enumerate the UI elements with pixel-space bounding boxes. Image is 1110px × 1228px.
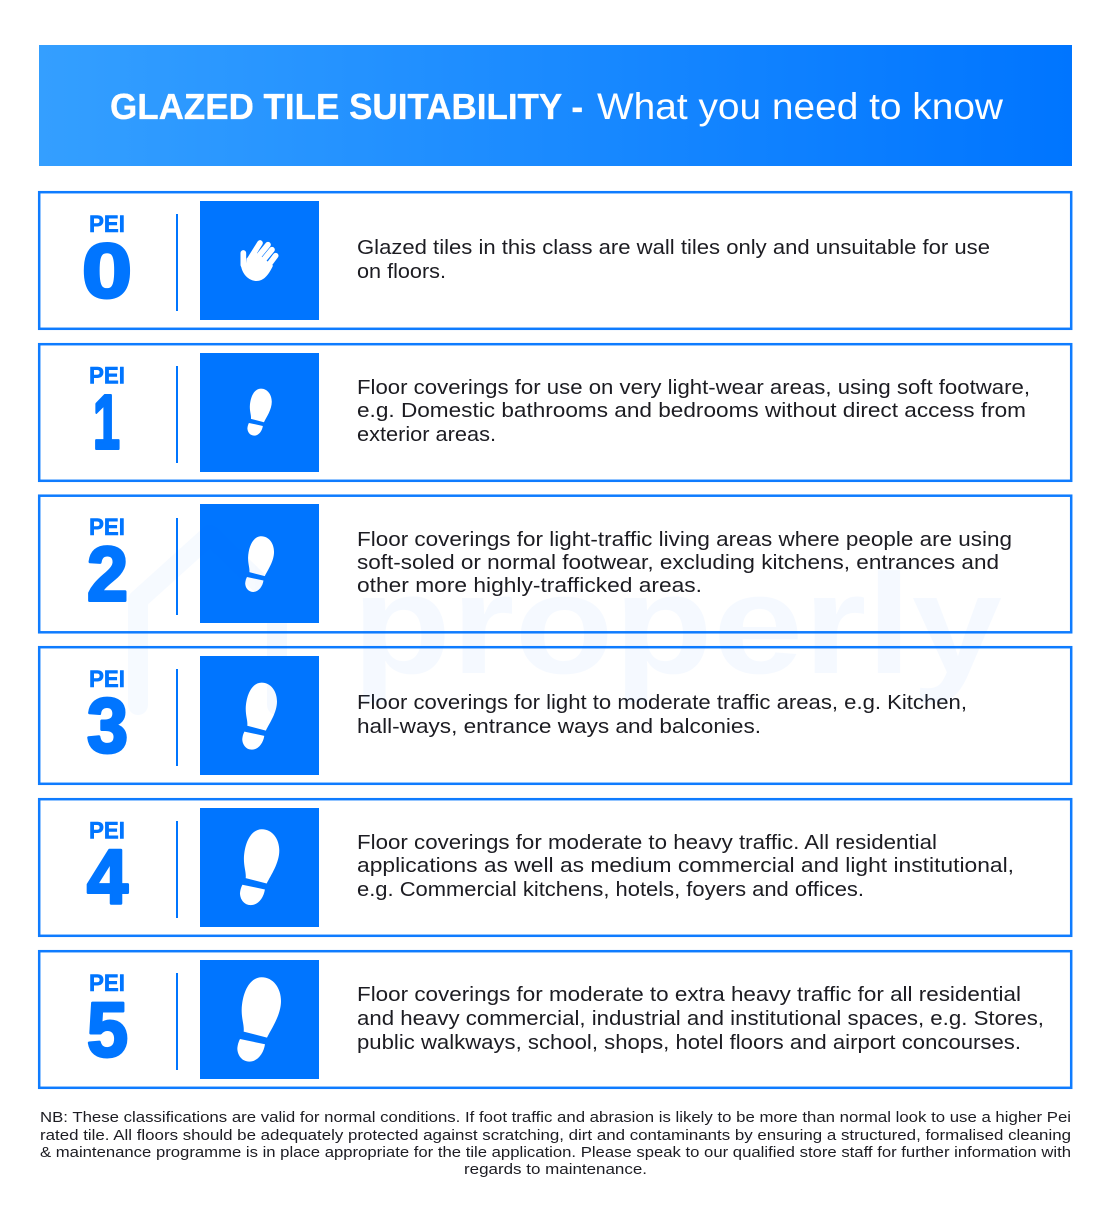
description PEI 2: other more highly-trafficked areas. <box>357 574 702 597</box>
panel: PEI 4 <box>39 799 1071 936</box>
icon: footprint large <box>200 808 319 927</box>
description PEI 3: hall-ways, entrance ways and balconies. <box>357 715 761 738</box>
title: GLAZED TILE SUITABILITY - <box>110 86 583 127</box>
description PEI 3: Floor coverings for light to moderate traffic areas, e.g. Kitchen, <box>357 691 967 714</box>
PEI 4 label: 4 <box>87 834 128 920</box>
description PEI 2: Floor coverings for light-traffic living areas where people are using <box>357 528 1012 551</box>
icon: footprint largest <box>200 960 319 1079</box>
PEI 3 label: PEI <box>89 666 125 693</box>
description PEI 2 <box>357 528 1012 597</box>
description PEI 0 <box>357 236 990 283</box>
footnote: & maintenance programme is in place appropriate for the tile application. Please speak to our qualified store staff for further information with <box>40 1144 1071 1161</box>
description PEI 0: on floors. <box>357 260 446 283</box>
description PEI 4: e.g. Commercial kitchens, hotels, foyers and offices. <box>357 878 864 901</box>
description PEI 0: Glazed tiles in this class are wall tiles only and unsuitable for use <box>357 236 990 259</box>
footnote: rated tile. All floors should be adequately protected against scratching, dirt and contaminants by ensuring a structured, formalised cleaning <box>40 1127 1071 1144</box>
description PEI 1: exterior areas. <box>357 423 496 446</box>
description PEI 5: and heavy commercial, industrial and institutional spaces, e.g. Stores, <box>357 1007 1044 1030</box>
panel: PEI 2 <box>39 496 1071 632</box>
watermark: properly: properly <box>352 545 1002 704</box>
icon: footprint <box>200 504 319 623</box>
description PEI 4: applications as well as medium commercial and light institutional, <box>357 854 1014 877</box>
PEI 2 label: 2 <box>87 532 128 618</box>
footnote: regards to maintenance. <box>464 1161 647 1178</box>
description PEI 5 <box>357 983 1044 1054</box>
description PEI 1: Floor coverings for use on very light-wear areas, using soft footware, <box>357 376 1030 399</box>
panel: PEI 0 <box>39 192 1071 329</box>
PEI 1 label: 1 <box>93 380 120 466</box>
description PEI 5: public walkways, school, shops, hotel floors and airport concourses. <box>357 1031 1021 1054</box>
title banner <box>39 45 1072 166</box>
description PEI 4 <box>357 831 1014 901</box>
icon: hand <box>200 201 319 320</box>
PEI 3 label: 3 <box>87 683 128 769</box>
description PEI 2: soft-soled or normal footwear, excluding kitchens, entrances and <box>357 551 999 574</box>
footnote <box>40 1109 1071 1178</box>
description PEI 1 <box>357 376 1030 446</box>
PEI 1 label <box>89 362 125 466</box>
PEI 5 label: PEI <box>89 970 125 997</box>
panel: PEI 5 <box>39 951 1071 1088</box>
PEI 0 label: PEI <box>89 211 125 238</box>
PEI 4 label: PEI <box>89 818 125 844</box>
description PEI 1: e.g. Domestic bathrooms and bedrooms without direct access from <box>357 399 1026 422</box>
icon: footprint medium <box>200 656 319 775</box>
subtitle: What you need to know <box>597 86 1003 127</box>
description PEI 4: Floor coverings for moderate to heavy traffic. All residential <box>357 831 937 854</box>
PEI 0 label: 0 <box>82 228 132 314</box>
footnote: NB: These classifications are valid for normal conditions. If foot traffic and abrasion is likely to be more than normal look to use a higher Pei <box>40 1109 1071 1126</box>
watermark: properly <box>138 535 1002 705</box>
panel: PEI 3 <box>39 647 1071 784</box>
icon: footprint small <box>200 353 319 472</box>
PEI 1 label: PEI <box>89 362 125 390</box>
panel: PEI 1 <box>39 344 1071 481</box>
description PEI 3 <box>357 691 967 738</box>
description PEI 5: Floor coverings for moderate to extra heavy traffic for all residential <box>357 983 1021 1006</box>
PEI 5 label: 5 <box>87 988 128 1074</box>
PEI 2 label: PEI <box>89 514 125 541</box>
